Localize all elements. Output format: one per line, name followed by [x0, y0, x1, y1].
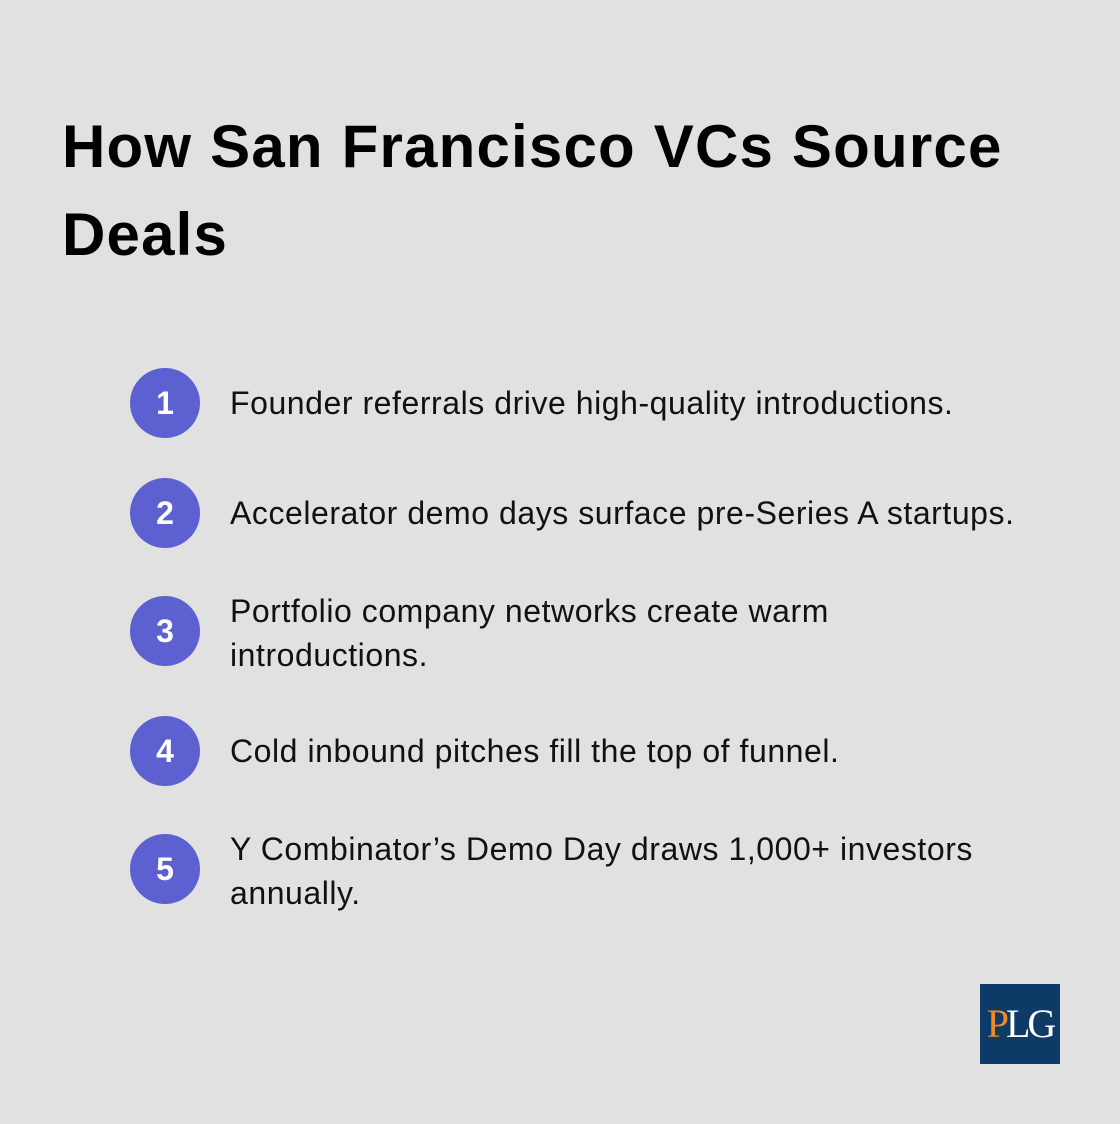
title: How San Francisco VCs Source Deals: [62, 113, 1003, 268]
item 2: 2: [156, 495, 174, 531]
item 2: [130, 478, 1015, 548]
item 1: Founder referrals drive high-quality introductions.: [230, 385, 954, 421]
item 4: Cold inbound pitches fill the top of funnel.: [230, 733, 839, 769]
item 3: introductions.: [230, 637, 428, 673]
item 5: annually.: [230, 875, 361, 911]
logo: [980, 984, 1060, 1064]
item 5: [130, 831, 973, 911]
item 3: Portfolio company networks create warm: [230, 593, 829, 629]
item 4: 4: [156, 733, 174, 769]
item 3: 3: [156, 613, 174, 649]
item 4: [130, 716, 839, 786]
item 3: [130, 593, 829, 673]
item 1: 1: [156, 385, 174, 421]
logo: PLG: [987, 1001, 1053, 1046]
item 2: Accelerator demo days surface pre-Series A startups.: [230, 495, 1015, 531]
item 5: Y Combinator’s Demo Day draws 1,000+ investors: [230, 831, 973, 867]
item 5: 5: [156, 851, 174, 887]
item 1: [130, 368, 954, 438]
